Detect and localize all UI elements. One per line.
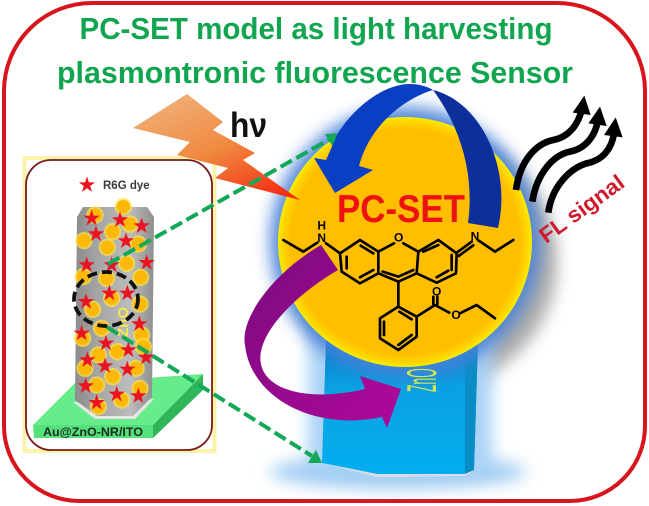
- ZnO label on large rod: ZnO: [398, 368, 446, 392]
- ZnO nanorod: [73, 207, 154, 419]
- h-nu label: hν: [230, 106, 267, 145]
- molecule heteroatoms: O: [432, 285, 441, 299]
- blue energy transfer arrow: [314, 84, 501, 228]
- molecule heteroatoms: O: [394, 230, 403, 244]
- title: PC-SET model as light harvesting: [80, 11, 552, 46]
- PC-SET label: PC-SET: [337, 188, 465, 231]
- R6G dye stars: [73, 210, 155, 410]
- FL signal label: FL signal: [534, 170, 629, 248]
- panel: Au@ZnO nanorod electrode: [24, 158, 214, 451]
- dashed green line to nanoparticle: [108, 133, 341, 264]
- legend: R6G dye: R6G dye: [103, 180, 150, 192]
- dashed green line to large rod: [107, 327, 322, 463]
- rhodamine molecule: [283, 218, 513, 350]
- substrate: green ITO plate: [33, 374, 203, 438]
- molecule heteroatoms: H: [317, 218, 326, 232]
- molecule heteroatoms: N: [471, 230, 479, 244]
- large ZnO rod: [270, 320, 526, 489]
- molecule heteroatoms: N: [317, 231, 326, 245]
- gold nanoparticle with glow: [270, 107, 540, 377]
- dashed selection ellipse: [74, 272, 138, 326]
- legend: R6G dye: [79, 176, 150, 192]
- molecule heteroatoms: O: [451, 308, 461, 322]
- gold nanoparticles: [74, 198, 152, 415]
- fluorescence signal arrows: [516, 96, 623, 213]
- soft grey shadow of nanoparticle: [293, 134, 557, 390]
- title: plasmontronic fluorescence Sensor: [57, 55, 573, 90]
- title: [57, 11, 573, 90]
- purple energy transfer arrow: [244, 245, 401, 428]
- substrate label: Au@ZnO-NR/ITO: [43, 427, 143, 439]
- ZnO label on small rod: ZnO: [115, 307, 132, 337]
- lightning bolt: [133, 94, 300, 200]
- molecule heteroatoms: [317, 218, 479, 322]
